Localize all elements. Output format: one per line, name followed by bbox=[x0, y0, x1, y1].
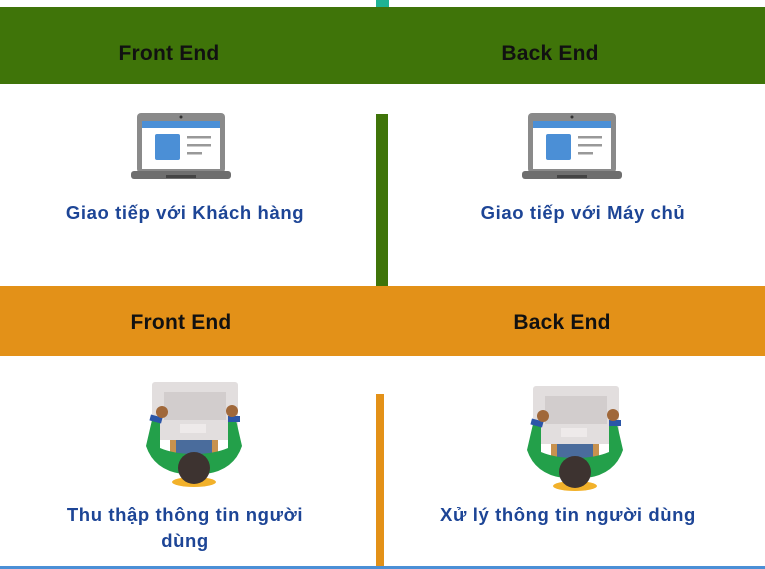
header band: green bbox=[0, 7, 765, 84]
heading: Back End (orange): Back End bbox=[513, 311, 611, 334]
caption: process info: Xử lý thông tin người dùng bbox=[440, 504, 696, 525]
bottom line bbox=[0, 566, 765, 569]
caption: collect info: Thu thập thông tin người bbox=[67, 504, 303, 525]
icon: person at laptop back bbox=[527, 386, 623, 491]
header band: orange bbox=[0, 286, 765, 356]
heading: Front End (green): Front End bbox=[119, 42, 219, 65]
caption: front comm: Giao tiếp với Khách hàng bbox=[66, 202, 304, 223]
caption: collect info: dùng bbox=[161, 530, 209, 551]
icon: person at laptop front bbox=[146, 382, 242, 487]
heading: Back End (green): Back End bbox=[501, 42, 599, 65]
icon: laptop back bbox=[522, 113, 622, 179]
caption: collect info bbox=[67, 504, 303, 551]
icon: laptop front bbox=[131, 113, 231, 179]
top connector bbox=[376, 0, 389, 7]
heading: Front End (orange): Front End bbox=[131, 311, 231, 334]
caption: back comm: Giao tiếp với Máy chủ bbox=[481, 202, 685, 223]
divider: green vertical bbox=[376, 114, 388, 286]
divider: orange vertical bbox=[376, 394, 384, 569]
